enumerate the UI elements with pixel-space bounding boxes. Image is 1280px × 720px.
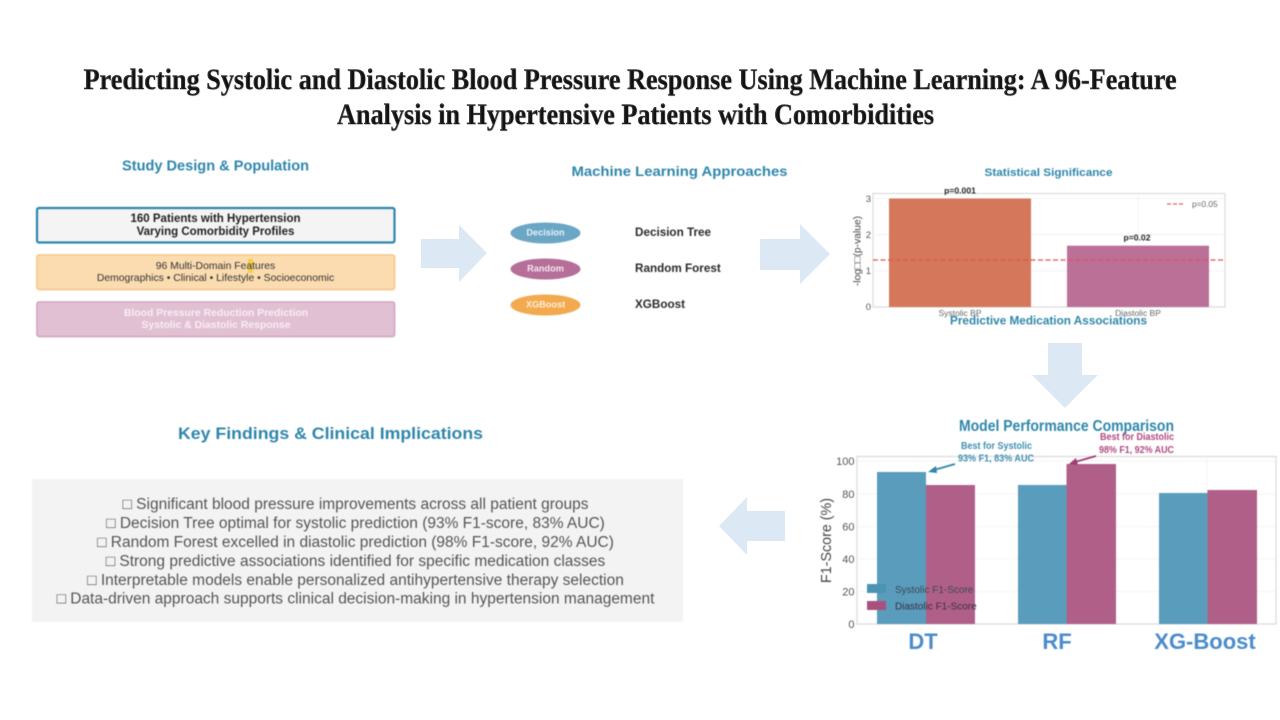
value labels: p=0.02 xyxy=(1124,232,1151,242)
model: xgboost: XGBoost xyxy=(635,298,685,311)
axis ticks xyxy=(836,456,854,631)
panel: study design and population xyxy=(37,158,394,336)
box: features: Demographics • Clinical • Lifestyle • Socioeconomic xyxy=(97,273,334,284)
axis ticks: 80 xyxy=(842,489,854,501)
findings list: □ Random Forest excelled in diastolic prediction (98% F1-score, 92% AUC) xyxy=(97,534,614,551)
legend: f1-score xyxy=(867,584,977,612)
bars: xgboost xyxy=(1159,490,1257,624)
bar: diastolic significance xyxy=(1067,246,1209,307)
legend: threshold xyxy=(1167,199,1218,209)
heading: statistical significance: Statistical Significance xyxy=(984,167,1112,179)
value labels: p=0.001 xyxy=(944,186,976,196)
axis title: F1-Score (%) xyxy=(819,498,835,583)
arrow: approaches to significance xyxy=(760,224,830,284)
arrow: performance to findings xyxy=(719,497,785,555)
callout: best for systolic: 93% F1, 83% AUC xyxy=(958,454,1034,464)
findings list: □ Strong predictive associations identified for specific medication classes xyxy=(106,553,606,570)
heading: study design: Study Design & Population xyxy=(122,158,309,174)
axis title: -log□□(p-value) xyxy=(852,216,864,286)
bars: decision tree xyxy=(877,472,975,624)
callout: best for diastolic: Best for Diastolic xyxy=(1100,432,1174,443)
box: outcome: Blood Pressure Reduction Prediction xyxy=(124,308,308,319)
bars: random forest xyxy=(1018,464,1116,624)
category labels: DT xyxy=(908,629,938,654)
arrow: significance to performance xyxy=(1032,343,1098,408)
legend: f1-score: Diastolic F1-Score xyxy=(895,602,977,612)
findings list: □ Data-driven approach supports clinical decision-making in hypertension management xyxy=(57,590,655,608)
findings list: □ Decision Tree optimal for systolic prediction (93% F1-score, 83% AUC) xyxy=(106,515,605,532)
category labels xyxy=(908,629,1256,654)
arrow: study to approaches xyxy=(421,225,487,282)
callout: best for diastolic: 98% F1, 92% AUC xyxy=(1099,445,1174,456)
axis ticks: 1 xyxy=(866,266,871,277)
box: outcome: Systolic & Diastolic Response xyxy=(142,320,291,331)
box: features xyxy=(37,255,394,290)
model: xgboost: XGBoost xyxy=(526,300,565,310)
axis ticks: 40 xyxy=(842,554,854,566)
chart: statistical significance xyxy=(852,167,1225,328)
chart: model performance comparison xyxy=(819,418,1276,654)
threshold line xyxy=(873,259,1225,261)
axis ticks: 20 xyxy=(842,586,854,598)
axis ticks: 60 xyxy=(842,522,854,534)
category labels: XG-Boost xyxy=(1154,629,1256,654)
legend: threshold: p=0.05 xyxy=(1192,199,1218,209)
callout: best for systolic xyxy=(928,441,1034,473)
callout: best for systolic: Best for Systolic xyxy=(961,441,1032,452)
model: random forest: Random xyxy=(527,264,564,274)
model: decision tree: Decision Tree xyxy=(635,226,712,239)
axis ticks: 0 xyxy=(848,619,854,631)
model: xgboost xyxy=(510,294,685,316)
title: Analysis in Hypertensive Patients with Comorbidities xyxy=(337,99,934,131)
axis ticks xyxy=(866,194,871,313)
axis ticks: 3 xyxy=(866,194,871,205)
findings list: □ Interpretable models enable personalized antihypertensive therapy selection xyxy=(87,572,624,589)
value labels xyxy=(944,186,1151,242)
model: decision tree: Decision xyxy=(526,228,565,238)
axis ticks: 100 xyxy=(836,456,854,468)
title: Predicting Systolic and Diastolic Blood Pressure Response Using Machine Learning: A 96-Feature xyxy=(84,64,1176,96)
title xyxy=(84,64,1176,131)
callout: best for diastolic xyxy=(1069,432,1174,465)
chart: statistical significance: Diastolic BP xyxy=(1115,308,1161,318)
bar: systolic significance xyxy=(889,198,1031,307)
model: decision tree xyxy=(510,222,712,244)
findings list: □ Significant blood pressure improvements across all patient groups xyxy=(123,496,589,513)
axis ticks: 0 xyxy=(866,302,871,313)
legend: f1-score: Systolic F1-Score xyxy=(895,585,974,596)
box: patients xyxy=(37,208,394,242)
box: patients: 160 Patients with Hypertension xyxy=(130,213,300,225)
box: features: 96 Multi-Domain Features xyxy=(156,261,275,272)
axis ticks: 2 xyxy=(866,230,871,241)
model: random forest: Random Forest xyxy=(635,262,721,275)
findings list xyxy=(57,496,655,608)
heading: model performance: Model Performance Comparison xyxy=(959,418,1174,435)
box: patients: Varying Comorbidity Profiles xyxy=(137,226,294,238)
chart: statistical significance: Systolic BP xyxy=(938,308,982,318)
heading: machine learning: Machine Learning Approaches xyxy=(572,163,788,179)
model: random forest xyxy=(510,258,721,280)
box: outcome xyxy=(37,302,394,336)
heading: predictive medication associations: Predictive Medication Associations xyxy=(950,316,1147,328)
category labels: RF xyxy=(1042,629,1072,654)
heading: key findings: Key Findings & Clinical Implications xyxy=(178,424,483,443)
panel: machine learning approaches xyxy=(510,163,788,316)
panel: key findings and clinical implications xyxy=(32,424,683,622)
